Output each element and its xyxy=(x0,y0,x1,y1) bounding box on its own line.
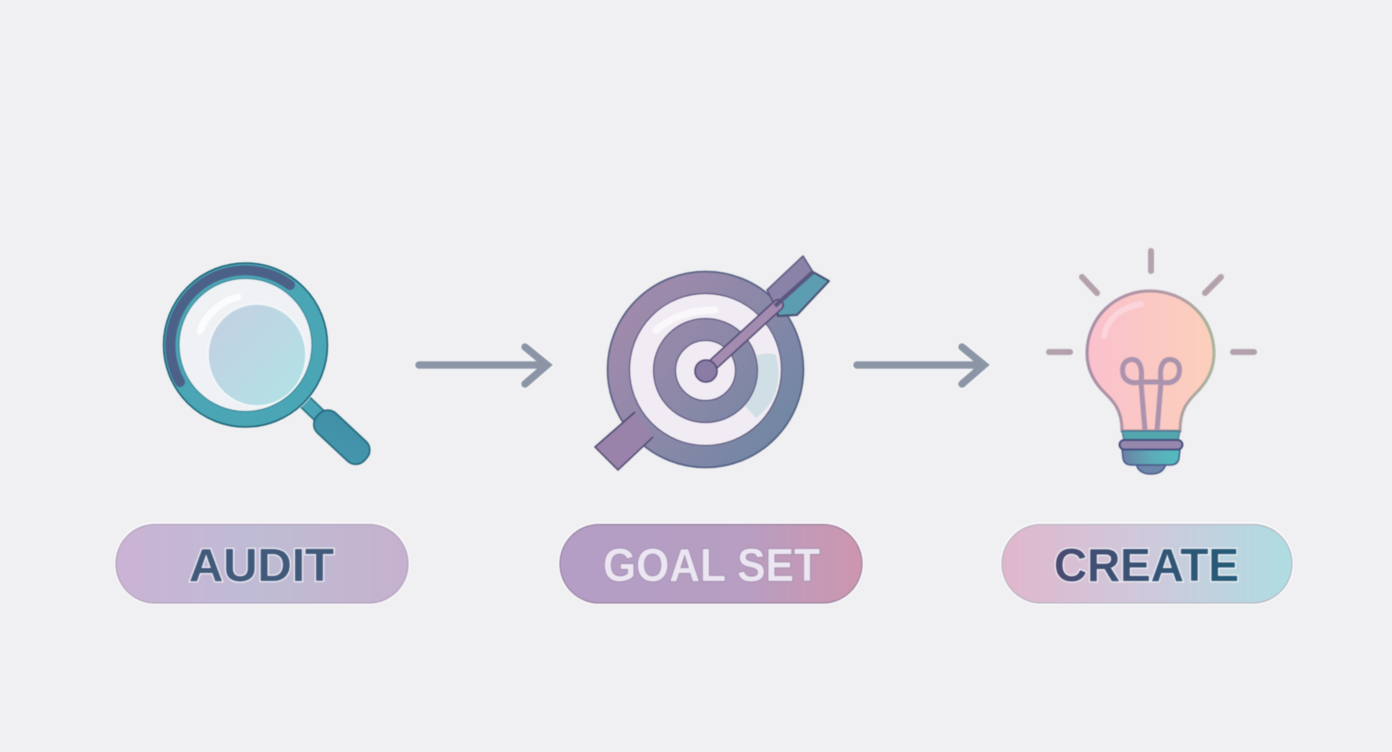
rays xyxy=(1049,251,1254,352)
pill: CREATE: CREATE xyxy=(1054,539,1239,591)
screw base xyxy=(1122,431,1180,441)
pill: AUDIT xyxy=(114,522,410,605)
arrow tail block xyxy=(595,412,653,470)
pill: CREATE xyxy=(1000,522,1294,605)
icon: magnifying glass xyxy=(162,262,375,469)
arrow: goal set to create xyxy=(857,347,984,384)
icon: light bulb xyxy=(1049,251,1254,474)
arrow shaft xyxy=(706,305,778,371)
pill: GOAL SET xyxy=(558,522,864,605)
highlight xyxy=(656,310,715,330)
arrow: audit to goal set xyxy=(419,347,547,384)
icon: target with arrow xyxy=(595,256,829,470)
arrow fletching xyxy=(775,272,829,316)
glass highlight xyxy=(1104,304,1141,336)
glass xyxy=(1087,291,1214,431)
pill: AUDIT: AUDIT xyxy=(189,539,334,591)
pale wedge xyxy=(745,354,778,418)
filament xyxy=(1122,360,1180,431)
pill: GOAL SET: GOAL SET xyxy=(603,539,820,591)
